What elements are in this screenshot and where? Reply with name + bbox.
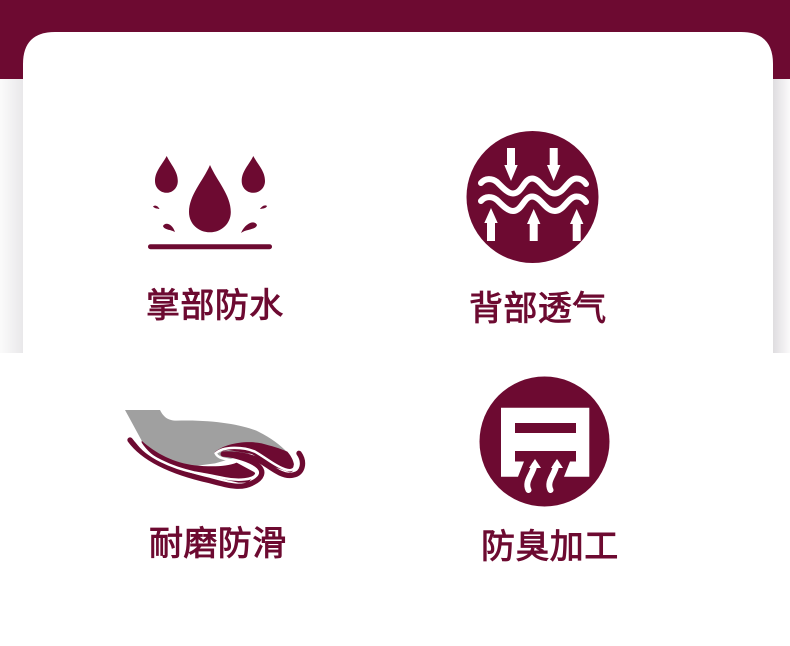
label: breathable back: 背部透气	[469, 290, 607, 328]
card side shadows	[0, 79, 790, 353]
header band	[0, 0, 790, 79]
label: abrasion and slip resistant: 耐磨防滑	[149, 525, 287, 563]
icon: abrasion-resistant glove	[125, 410, 302, 486]
white card	[23, 32, 773, 353]
icon: water drops	[148, 156, 272, 249]
icon: deodorizing treatment	[480, 376, 610, 506]
icon: breathable back	[466, 131, 598, 263]
label: palm waterproof: 掌部防水	[146, 287, 284, 325]
label: deodorizing treatment: 防臭加工	[481, 528, 619, 566]
